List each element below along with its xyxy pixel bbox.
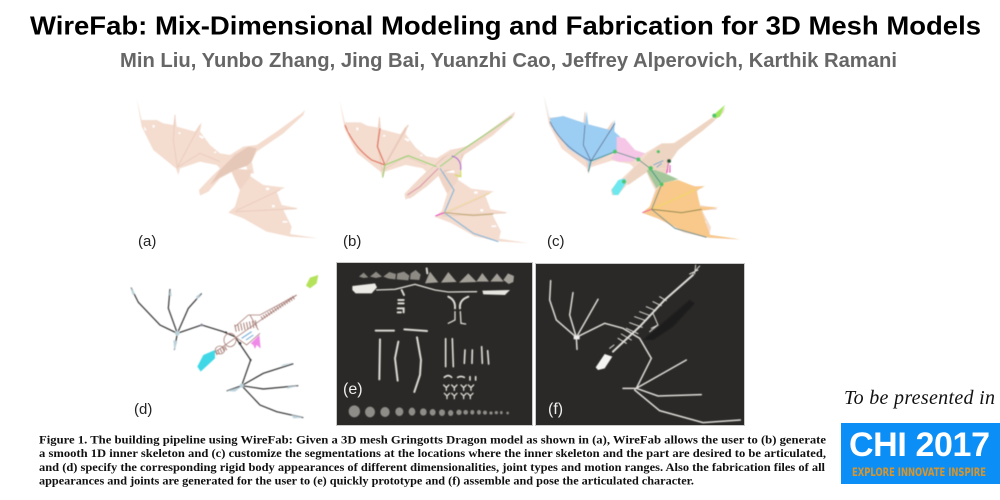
panel d: wire skeleton (130, 275, 318, 418)
panel a: mesh dragon: (a) (138, 233, 156, 250)
CHI 2017 badge: CHI 2017 (849, 426, 990, 464)
panel d: wire skeleton: (d) (134, 401, 152, 418)
to be presented note: To be presented in (844, 387, 995, 409)
figure caption: appearances and joints are generated for the user to (e) quickly prototype and (f) assemble and pose the articulated character. (39, 474, 694, 488)
panel e: printed parts photo (336, 262, 533, 426)
figure caption: Figure 1. The building pipeline using WireFab: Given a 3D mesh Gringotts Dragon model as shown in (a), WireFab allows the user to (b) generate (39, 434, 826, 446)
panel b: dragon with inner skeleton: (b) (343, 233, 361, 250)
authors: Min Liu, Yunbo Zhang, Jing Bai, Yuanzhi Cao, Jeffrey Alperovich, Karthik Ramani (120, 50, 897, 72)
panel c: segmented dragon (544, 95, 740, 250)
panel b: dragon with inner skeleton (340, 100, 529, 250)
panel c: segmented dragon: (c) (547, 233, 564, 250)
panel f: assembled character photo: (f) (548, 401, 563, 418)
panel e: printed parts photo: (e) (343, 381, 363, 398)
panel f: assembled character photo (535, 263, 745, 426)
figure caption: a smooth 1D inner skeleton and (c) customize the segmentations at the locations where the inner skeleton and the part are desired to be articulated, (39, 447, 826, 460)
figure caption: and (d) specify the corresponding rigid body appearances of different dimensionalities, joint types and motion ranges. Also the fabrication files of all (39, 461, 826, 474)
figure caption (39, 434, 826, 488)
panel a: mesh dragon (137, 98, 318, 250)
title: WireFab: Mix-Dimensional Modeling and Fabrication for 3D Mesh Models (30, 10, 981, 40)
CHI 2017 badge (841, 423, 1000, 484)
